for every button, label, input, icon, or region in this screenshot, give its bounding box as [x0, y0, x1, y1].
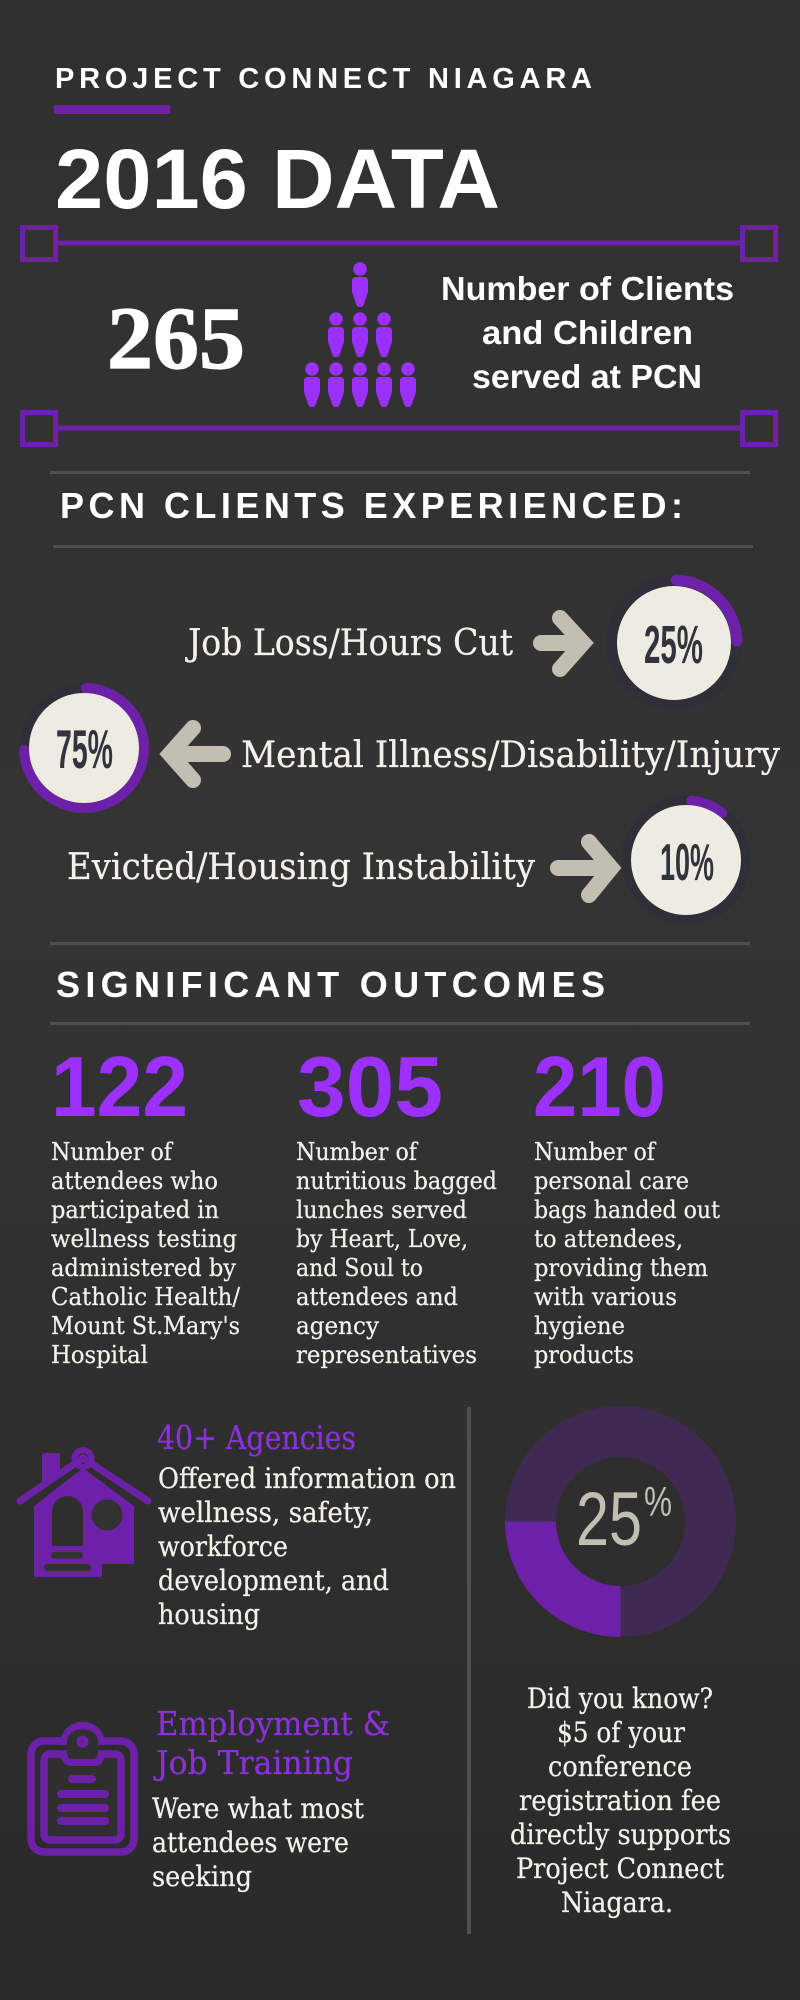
donut: 10 percent: 10% — [660, 834, 714, 892]
icon: clipboard — [31, 1722, 134, 1852]
row: evicted 10 percent — [67, 796, 750, 924]
label: job loss: Job Loss/Hours Cut — [184, 623, 513, 664]
label: evicted: Evicted/Housing Instability — [67, 847, 536, 888]
icon: house — [20, 1450, 148, 1577]
text: employment and job training: Were what most — [152, 1792, 365, 1825]
text: 40+ agencies: 40+ Agencies — [157, 1418, 356, 1457]
donut chart: 25 percent: % — [644, 1478, 672, 1525]
donut: 25 percent — [606, 575, 742, 711]
arrow: right — [541, 618, 583, 669]
description: with various — [534, 1283, 677, 1311]
label: mental illness: Mental Illness/Disability/Injury — [241, 735, 781, 776]
text: 40+ agencies: development, and — [158, 1564, 389, 1597]
description — [534, 1138, 720, 1369]
description: products — [534, 1341, 634, 1369]
donut: 10 percent — [622, 796, 750, 924]
text: employment and job training: seeking — [152, 1860, 252, 1893]
description: lunches served — [296, 1196, 467, 1224]
text: did you know: Niagara. — [561, 1886, 673, 1919]
stat: 265 clients: 265 — [107, 290, 245, 388]
text: employment and job training — [152, 1704, 390, 1893]
heading: project name — [54, 63, 592, 114]
donut: 75 percent: 75% — [56, 718, 113, 780]
donut chart: 25 percent — [530, 1432, 710, 1612]
description: Hospital — [51, 1341, 148, 1369]
text: number of clients label: Number of Clients — [441, 270, 734, 307]
description: hygiene — [534, 1312, 625, 1340]
description: administered by — [51, 1254, 236, 1282]
arrow: right — [558, 842, 611, 895]
description: Number of — [534, 1138, 657, 1166]
description: representatives — [296, 1341, 477, 1369]
text: employment and job training: Job Training — [153, 1743, 353, 1782]
text: did you know: Project Connect — [516, 1852, 725, 1885]
donut: 25 percent: 25% — [644, 615, 703, 675]
bottom bracket — [22, 412, 776, 444]
text: number of clients label: and Children — [482, 314, 693, 351]
description: to attendees, — [534, 1225, 683, 1253]
column: 210 care bags — [533, 1040, 720, 1369]
description — [51, 1138, 241, 1369]
row: mental illness 75 percent — [19, 683, 781, 813]
row: job loss 25 percent — [184, 575, 742, 711]
text: did you know: registration fee — [519, 1784, 721, 1817]
description: bags handed out — [534, 1196, 720, 1224]
description: attendees and — [296, 1283, 458, 1311]
heading: significant outcomes: SIGNIFICANT OUTCOMES — [56, 964, 605, 1005]
description: agency — [296, 1312, 379, 1340]
column: 305 lunches — [296, 1040, 497, 1369]
text: employment and job training: attendees were — [152, 1826, 349, 1859]
number: 122 — [51, 1040, 188, 1135]
description — [296, 1138, 497, 1369]
heading: PCN clients experienced: PCN CLIENTS EXPERIENCED: — [60, 485, 683, 526]
column: 122 attendees — [51, 1040, 241, 1369]
text: 40+ agencies: Offered information on — [158, 1462, 456, 1495]
arrow: left — [170, 728, 223, 780]
heading: project name: PROJECT CONNECT NIAGARA — [55, 63, 592, 95]
text: number of clients label — [441, 270, 734, 395]
top bracket — [22, 228, 776, 260]
donut chart: 25 percent: 25 — [576, 1477, 642, 1562]
description: personal care — [534, 1167, 689, 1195]
text: number of clients label: served at PCN — [472, 358, 702, 395]
description: participated in — [51, 1196, 219, 1224]
icon: people pyramid — [304, 262, 416, 407]
text: did you know: Did you know? — [527, 1682, 713, 1715]
text: 40+ agencies: wellness, safety, — [158, 1496, 373, 1529]
text: employment and job training: Employment & — [156, 1704, 390, 1743]
number: 305 — [297, 1040, 443, 1135]
donut: 75 percent — [19, 683, 149, 813]
title: 2016 DATA — [55, 132, 500, 226]
description: Number of — [51, 1138, 174, 1166]
text: did you know — [510, 1682, 731, 1919]
description: Mount St.Mary's — [51, 1312, 240, 1340]
description: and Soul to — [296, 1254, 423, 1282]
description: attendees who — [51, 1167, 218, 1195]
description: wellness testing — [51, 1225, 237, 1253]
description: providing them — [534, 1254, 708, 1282]
text: did you know: directly supports — [510, 1818, 731, 1851]
number: 210 — [533, 1040, 666, 1135]
description: by Heart, Love, — [296, 1225, 468, 1253]
text: 40+ agencies: workforce — [158, 1530, 288, 1563]
text: 40+ agencies: housing — [158, 1598, 260, 1631]
text: did you know: $5 of your — [557, 1716, 686, 1749]
text: did you know: conference — [548, 1750, 692, 1783]
description: Catholic Health/ — [51, 1283, 241, 1311]
description: nutritious bagged — [296, 1167, 497, 1195]
text: 40+ agencies — [157, 1418, 456, 1631]
description: Number of — [296, 1138, 419, 1166]
